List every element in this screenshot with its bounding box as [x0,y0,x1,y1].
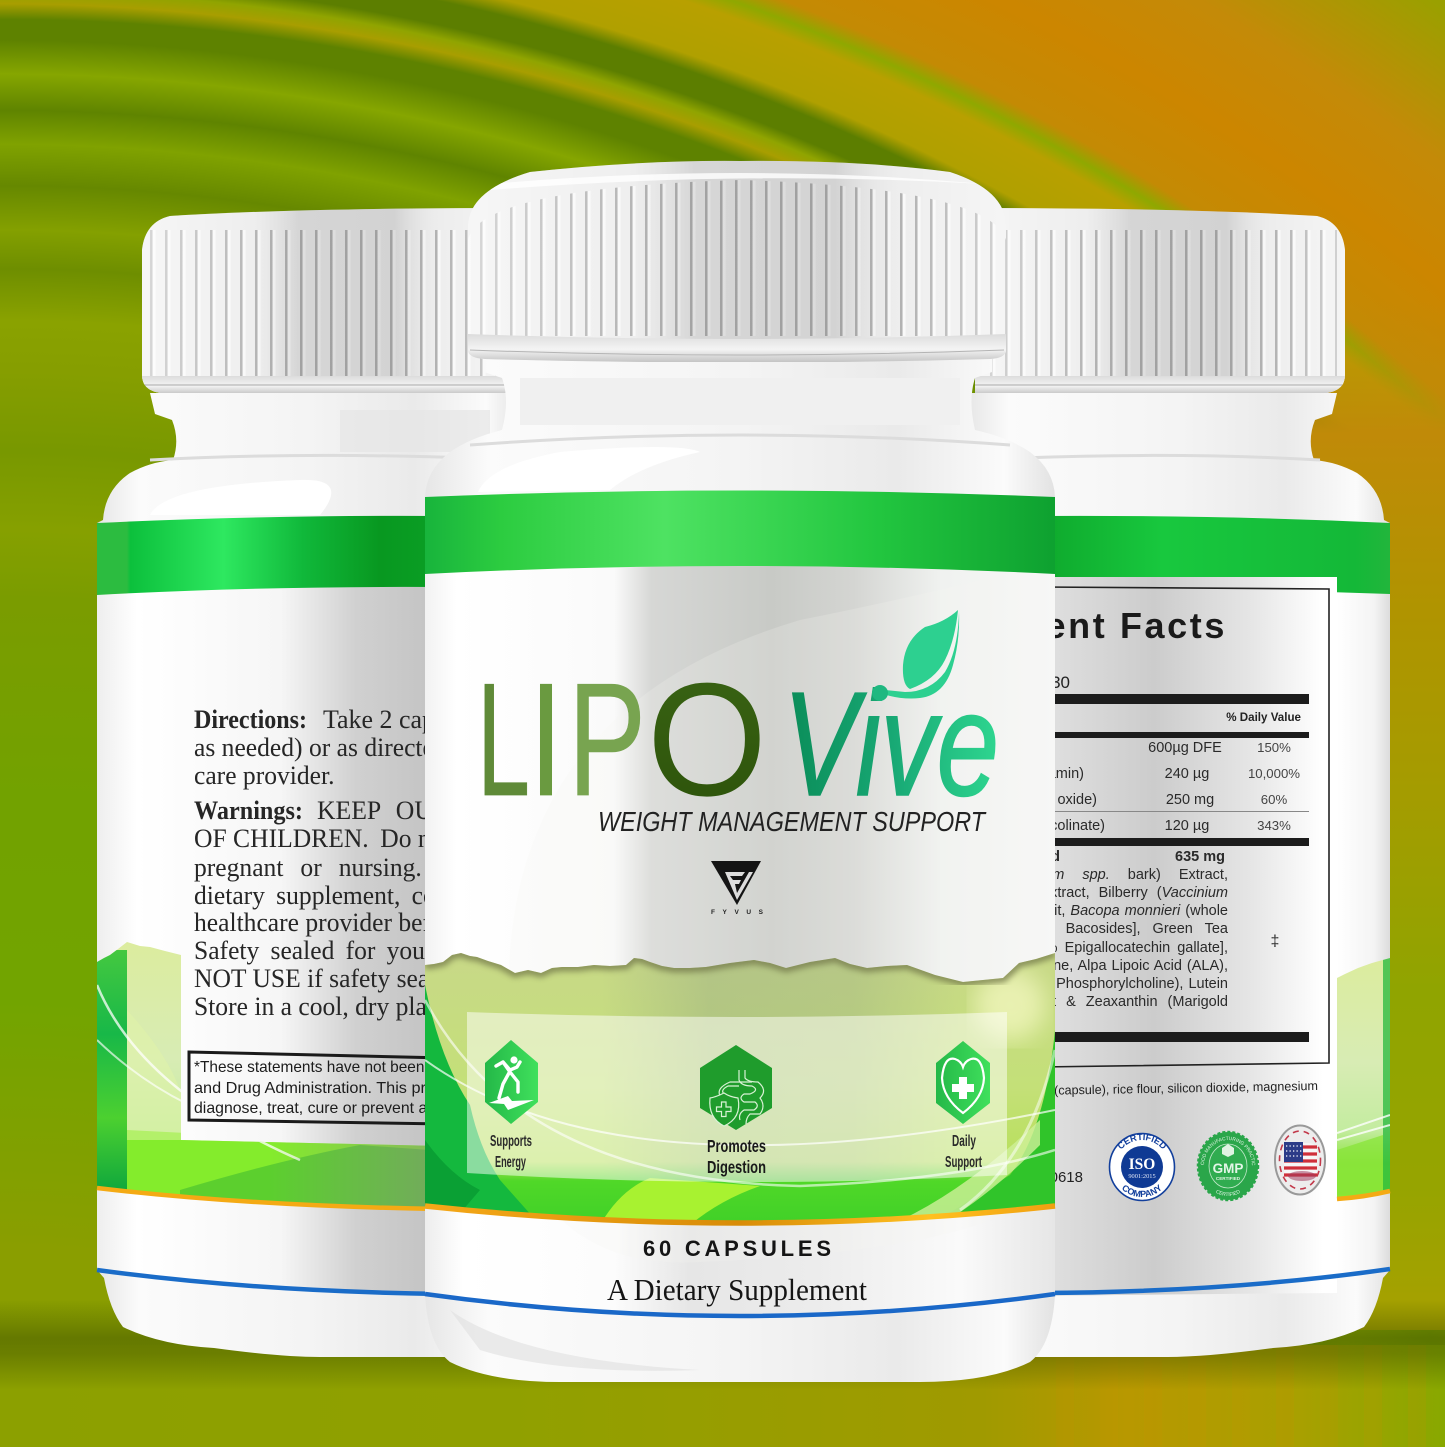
nutrient rows: 240 µg [1165,766,1209,782]
proprietary blend list: Cinnamomum spp. bark) Extract, [974,867,1228,883]
feature: promotes digestion: Digestion [707,1157,766,1177]
badge: GMP certified: CERTIFIED [1216,1190,1240,1196]
badge: GMP certified [1196,1130,1260,1202]
front blue stripe [425,1294,1055,1316]
left directions text: KEEP OUT [317,796,449,825]
features translucent panel [467,1012,1007,1182]
feature: daily support [936,1041,990,1171]
right art panel [1337,950,1392,1200]
front lower label [425,1200,1055,1316]
badge: GMP certified: GMP [1213,1161,1243,1176]
LIPO wordmark [477,650,767,830]
feature: supports energy: Energy [495,1154,526,1171]
dietary supplement line: A Dietary Supplement [607,1272,867,1307]
front bottle cap [468,160,1008,362]
left directions text: Warnings: [194,795,303,825]
LIPO wordmark: L [477,650,530,830]
feature: supports energy: Supports [490,1133,532,1150]
proprietary blend list: Extract, Bilberry (Vaccinium [1040,885,1228,901]
nutrient rows [942,740,1300,834]
proprietary blend list: [20% Bacosides], Green Tea [1020,921,1229,937]
tagline: WEIGHT MANAGEMENT SUPPORT [598,806,987,837]
FDA disclaimer box [189,1052,457,1124]
nutrient rows: 600µg DFE [1148,740,1222,756]
code digits: 30618 [1041,1169,1083,1186]
left bottle cap [142,205,514,395]
badge: ISO certified: ISO [1129,1156,1155,1173]
proprietary blend list: [50% Epigallocatechin gallate], [1024,940,1228,956]
LIPO wordmark: O [647,650,767,830]
feature: promotes digestion [700,1045,772,1177]
front bottle body [425,350,1055,1382]
nutrient rows: 60% [1261,792,1287,807]
nutrient rows: (as Chromium Picolinate) [942,818,1105,834]
badge: ISO certified: 9001:2015 [1128,1173,1156,1180]
left directions text: dietary supplement, consult [194,881,486,910]
front orange stripe [425,1206,1055,1223]
front green band [425,490,1055,574]
LIPO wordmark: P [568,650,646,830]
right orange stripe [1337,1191,1390,1199]
left directions text: pregnant or nursing. If [194,853,456,882]
front label base [425,490,1055,1215]
left art panel [97,942,425,1206]
right bottle: supplement facts side [972,208,1390,1357]
left directions text: Store in a cool, dry place [194,992,450,1021]
right label base [1040,516,1390,1296]
nutrient rows: (as Cyanocobalamin) [947,766,1084,782]
nutrient rows: 10,000% [1248,766,1300,781]
nutrient rows: 120 µg [1165,818,1209,834]
nutrient rows: 250 mg [1166,792,1214,808]
proprietary blend list: fruit, Bacopa monnieri (whole [1037,903,1228,919]
left directions text: as needed) or as directed [194,733,447,762]
badge: ISO certified [1108,1132,1176,1202]
left directions text: healthcare provider before [194,908,464,937]
left blue stripe [97,1270,440,1294]
faint translucent curve [509,560,1055,1262]
right label panel [1040,577,1337,1296]
badge: GMP certified: CERTIFIED [1216,1176,1241,1181]
left directions text: care provider. [194,761,335,790]
brand title: LIPO Vive [477,610,999,830]
icon: intestine and shield hexagon [700,1045,772,1130]
proprietary blend list: Choline, Alpa Lipoic Acid (ALA), [1020,958,1228,974]
FYVUS logo [711,861,764,916]
thick rules [1040,694,1309,1042]
left directions text: Take 2 capsules [323,705,487,734]
left orange stripe [97,1188,440,1209]
daily value dagger: ‡ [1271,933,1279,950]
FDA disclaimer box: *These statements have not been eval [194,1059,457,1076]
FDA disclaimer box: and Drug Administration. This prod [194,1080,444,1097]
LIPO wordmark: I [529,650,563,830]
proprietary blend list: (as Phosphorylcholine), Lutein [1031,976,1228,992]
feature: supports energy [485,1040,538,1171]
nutrient rows: 150% [1257,740,1291,755]
FDA disclaimer box: diagnose, treat, cure or prevent any [194,1100,444,1117]
feature: promotes digestion: Promotes [707,1136,766,1156]
left label base [97,516,440,1296]
left directions text: NOT USE if safety seal [194,964,436,993]
right green band [1040,516,1390,594]
badge: USA quality [1275,1126,1325,1194]
front bottle [425,160,1055,1382]
capsule count: 60 CAPSULES [643,1236,831,1261]
other ingredients text: Other Ingredients: gelatin (capsule), rice flour, silicon dioxide, magnesium [909,1079,1318,1100]
badge: ISO certified: COMPANY [1122,1184,1161,1198]
right blue stripe [1040,1269,1390,1293]
proprietary blend list: Extract & Zeaxanthin (Marigold [1011,994,1228,1010]
left directions text: Directions: [194,704,307,734]
nutrient rows: (as Magnesium oxide) [954,792,1097,808]
left bottle: directions and warnings side [97,205,520,1357]
left green band [97,516,440,595]
proprietary blend list: 635 mg [1175,849,1225,865]
supplement facts heading: Supplement Facts [875,605,1227,646]
icon: running figure hexagon [485,1040,538,1124]
leaf icon [872,610,959,701]
proprietary blend list [938,849,1229,1010]
icon: heart with cross hexagon [936,1041,990,1124]
proprietary blend list: Proprietary Blend [938,849,1060,865]
right bottle body [967,393,1390,1357]
daily value header: % Daily Value [1226,711,1302,724]
supplement facts panel [866,587,1329,1067]
front art panel [425,950,1055,1225]
Vive wordmark: Vive [783,662,999,827]
left directions text: Safety sealed for your [194,936,434,965]
left directions text: OF CHILDREN. Do not [194,824,451,853]
left bottle body [97,393,520,1357]
FYVUS logo: FYVUS [711,909,764,916]
right bottle cap [975,205,1345,395]
nutrient rows: 343% [1257,818,1291,833]
left directions text [194,704,487,1021]
servings line: Servings Per Container: 30 [866,673,1070,692]
feature: daily support: Daily [952,1133,976,1150]
feature: daily support: Support [945,1154,982,1171]
badge: ISO certified: CERTIFIED [1118,1134,1166,1148]
badge: GMP certified: GOOD MANUFACTURING PRACTICE [1200,1136,1256,1166]
